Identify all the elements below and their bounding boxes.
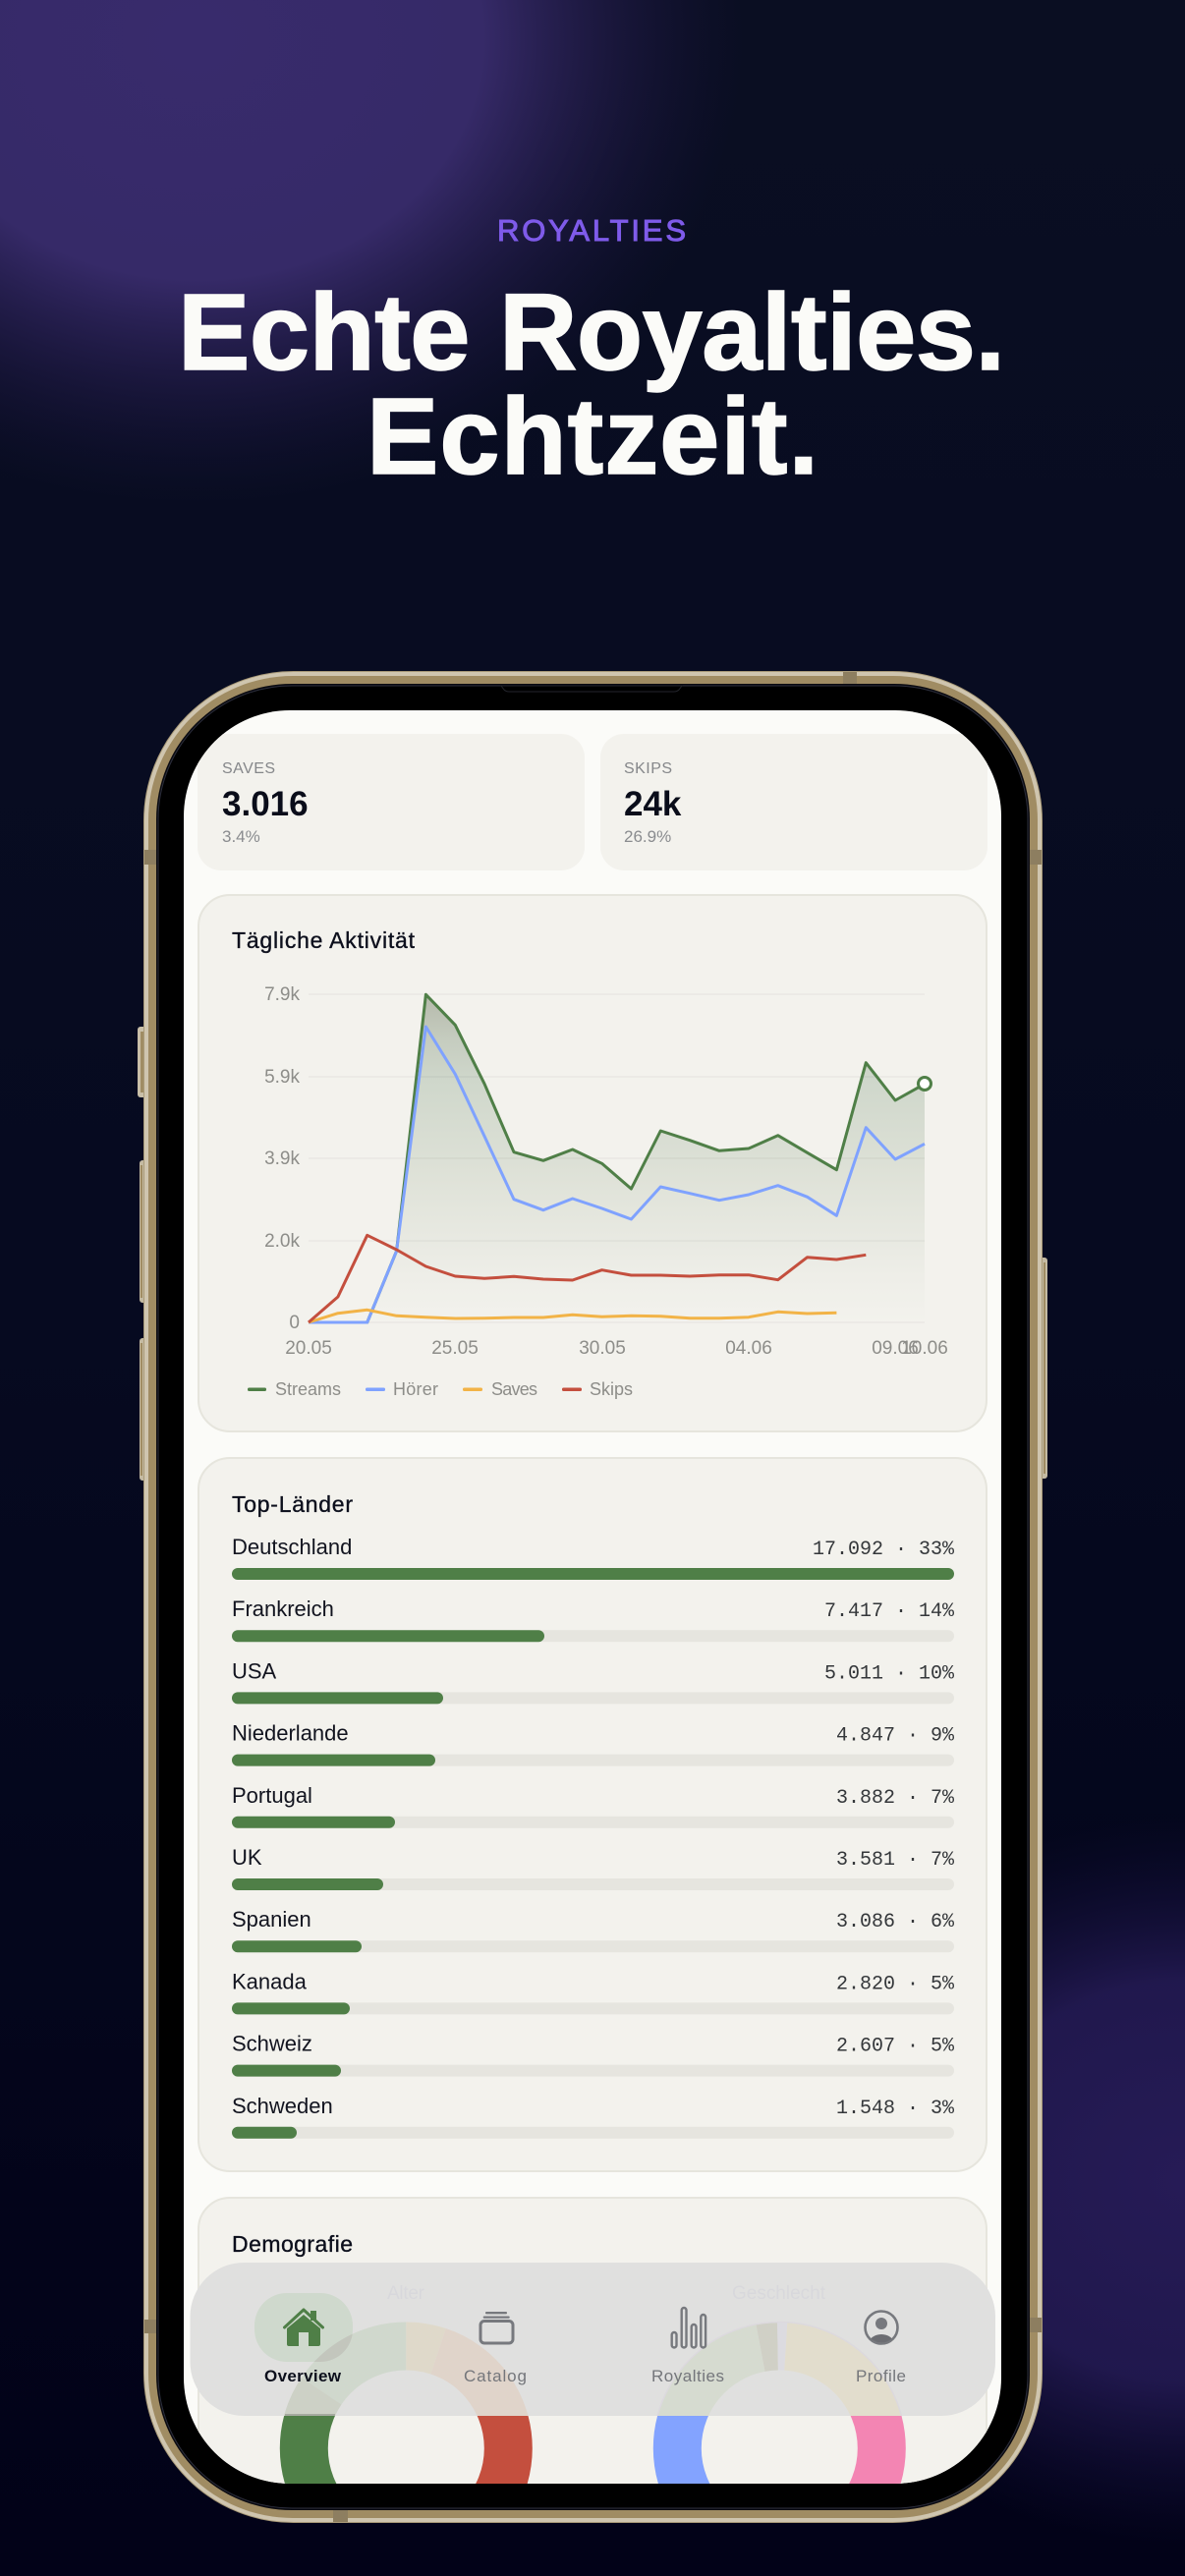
x axis labels: 30.05 bbox=[579, 1338, 626, 1359]
nav item: overview bbox=[254, 2293, 353, 2381]
legend: Skips bbox=[590, 1379, 633, 1399]
y axis labels: 3.9k bbox=[264, 1148, 300, 1169]
heading: top countries: Top-Länder bbox=[232, 1491, 353, 1517]
donut chart: age: Alter bbox=[387, 2283, 425, 2304]
row: USA bbox=[232, 1658, 955, 1704]
panel: demographics bbox=[198, 2197, 988, 2484]
icon: bar chart bbox=[672, 2308, 705, 2348]
phone mockup bbox=[138, 672, 1047, 2574]
nav item: royalties: Royalties bbox=[651, 2367, 724, 2385]
navigation bar background bbox=[191, 2263, 995, 2416]
row: Niederlande: Niederlande bbox=[232, 1721, 349, 1746]
row: USA: 5.011 · 10% bbox=[824, 1662, 955, 1685]
heading: demographics: Demografie bbox=[232, 2231, 353, 2257]
y axis labels: 0 bbox=[289, 1313, 300, 1333]
row: Frankreich: 7.417 · 14% bbox=[824, 1600, 955, 1623]
x axis labels: 10.06 bbox=[901, 1338, 948, 1359]
y axis labels: 7.9k bbox=[264, 984, 300, 1005]
panel: top countries bbox=[198, 1458, 987, 2171]
stat card: saves: 3.016 bbox=[222, 785, 309, 823]
heading: daily activity: Tägliche Aktivität bbox=[232, 927, 416, 953]
donut chart: gender: Geschlecht bbox=[732, 2283, 826, 2304]
row: Niederlande bbox=[232, 1721, 955, 1766]
icon: profile bbox=[865, 2311, 898, 2354]
title bbox=[178, 272, 1005, 497]
row: Portugal: 3.882 · 7% bbox=[836, 1787, 955, 1810]
series: streams bbox=[309, 994, 925, 1322]
row: Niederlande: 4.847 · 9% bbox=[836, 1725, 955, 1748]
row: Deutschland bbox=[232, 1535, 955, 1580]
nav item: profile bbox=[856, 2311, 906, 2385]
stat card: skips: SKIPS bbox=[624, 760, 672, 777]
y axis labels: 5.9k bbox=[264, 1067, 300, 1088]
legend: Streams bbox=[275, 1379, 341, 1399]
line chart bbox=[264, 984, 948, 1359]
y axis labels: 2.0k bbox=[264, 1231, 300, 1252]
row: Schweiz bbox=[232, 2032, 955, 2077]
stat card: saves bbox=[198, 734, 585, 870]
row: Schweiz: Schweiz bbox=[232, 2032, 312, 2056]
icon: catalog bbox=[480, 2312, 513, 2343]
donut chart: gender bbox=[652, 2323, 906, 2484]
eyebrow label: ROYALTIES bbox=[497, 213, 686, 248]
row: UK: 3.581 · 7% bbox=[836, 1849, 955, 1872]
title: Echtzeit. bbox=[367, 376, 818, 497]
series: listeners bbox=[309, 1027, 925, 1322]
row: UK bbox=[232, 1845, 955, 1890]
row: Deutschland: 17.092 · 33% bbox=[813, 1539, 955, 1561]
end marker bbox=[918, 1077, 931, 1091]
stat card: saves: 3.4% bbox=[222, 827, 260, 846]
stat card: skips bbox=[600, 734, 988, 870]
row: Kanada: Kanada bbox=[232, 1969, 308, 1993]
series: saves bbox=[309, 1310, 836, 1322]
x axis labels: 09.06 bbox=[872, 1338, 919, 1359]
row: Spanien bbox=[232, 1907, 955, 1952]
legend: Saves bbox=[491, 1379, 537, 1399]
y axis labels bbox=[264, 984, 300, 1333]
row: Frankreich: Frankreich bbox=[232, 1596, 334, 1621]
series: skips bbox=[309, 1235, 866, 1322]
row: UK: UK bbox=[232, 1845, 262, 1870]
nav item: profile: Profile bbox=[856, 2367, 906, 2385]
title: Echte Royalties. bbox=[178, 272, 1005, 393]
row: Spanien: 3.086 · 6% bbox=[836, 1911, 955, 1933]
nav item: royalties bbox=[651, 2308, 724, 2385]
stat card: saves: SAVES bbox=[222, 760, 275, 777]
side buttons bbox=[138, 1027, 1047, 1481]
x axis labels: 04.06 bbox=[725, 1338, 772, 1359]
row: USA: USA bbox=[232, 1658, 277, 1683]
row: Kanada bbox=[232, 1969, 955, 2014]
row: Schweden bbox=[232, 2094, 955, 2139]
icon: home bbox=[285, 2310, 322, 2346]
row: Kanada: 2.820 · 5% bbox=[836, 1973, 955, 1995]
row: Schweden: Schweden bbox=[232, 2094, 333, 2118]
x axis labels: 25.05 bbox=[431, 1338, 479, 1359]
row: Frankreich bbox=[232, 1596, 955, 1642]
row: Schweden: 1.548 · 3% bbox=[836, 2098, 955, 2120]
stat card: skips: 24k bbox=[624, 785, 682, 823]
row: Schweiz: 2.607 · 5% bbox=[836, 2036, 955, 2058]
x axis labels bbox=[286, 1340, 947, 1354]
row: Spanien: Spanien bbox=[232, 1907, 311, 1932]
navigation items bbox=[254, 2293, 906, 2385]
row: Portugal bbox=[232, 1783, 955, 1828]
nav item: overview: Overview bbox=[264, 2367, 342, 2385]
nav item: catalog bbox=[464, 2312, 527, 2385]
legend: Hörer bbox=[393, 1379, 438, 1399]
donut chart: age bbox=[279, 2323, 533, 2484]
x axis labels: 20.05 bbox=[285, 1338, 332, 1359]
stat card: skips: 26.9% bbox=[624, 827, 671, 846]
nav item: catalog: Catalog bbox=[464, 2367, 527, 2385]
panel: daily activity bbox=[198, 895, 987, 1431]
phone frame bbox=[143, 672, 1042, 2523]
row: Portugal: Portugal bbox=[232, 1783, 312, 1808]
legend bbox=[248, 1381, 633, 1399]
app screen bbox=[184, 710, 1001, 2574]
row: Deutschland: Deutschland bbox=[232, 1535, 352, 1559]
